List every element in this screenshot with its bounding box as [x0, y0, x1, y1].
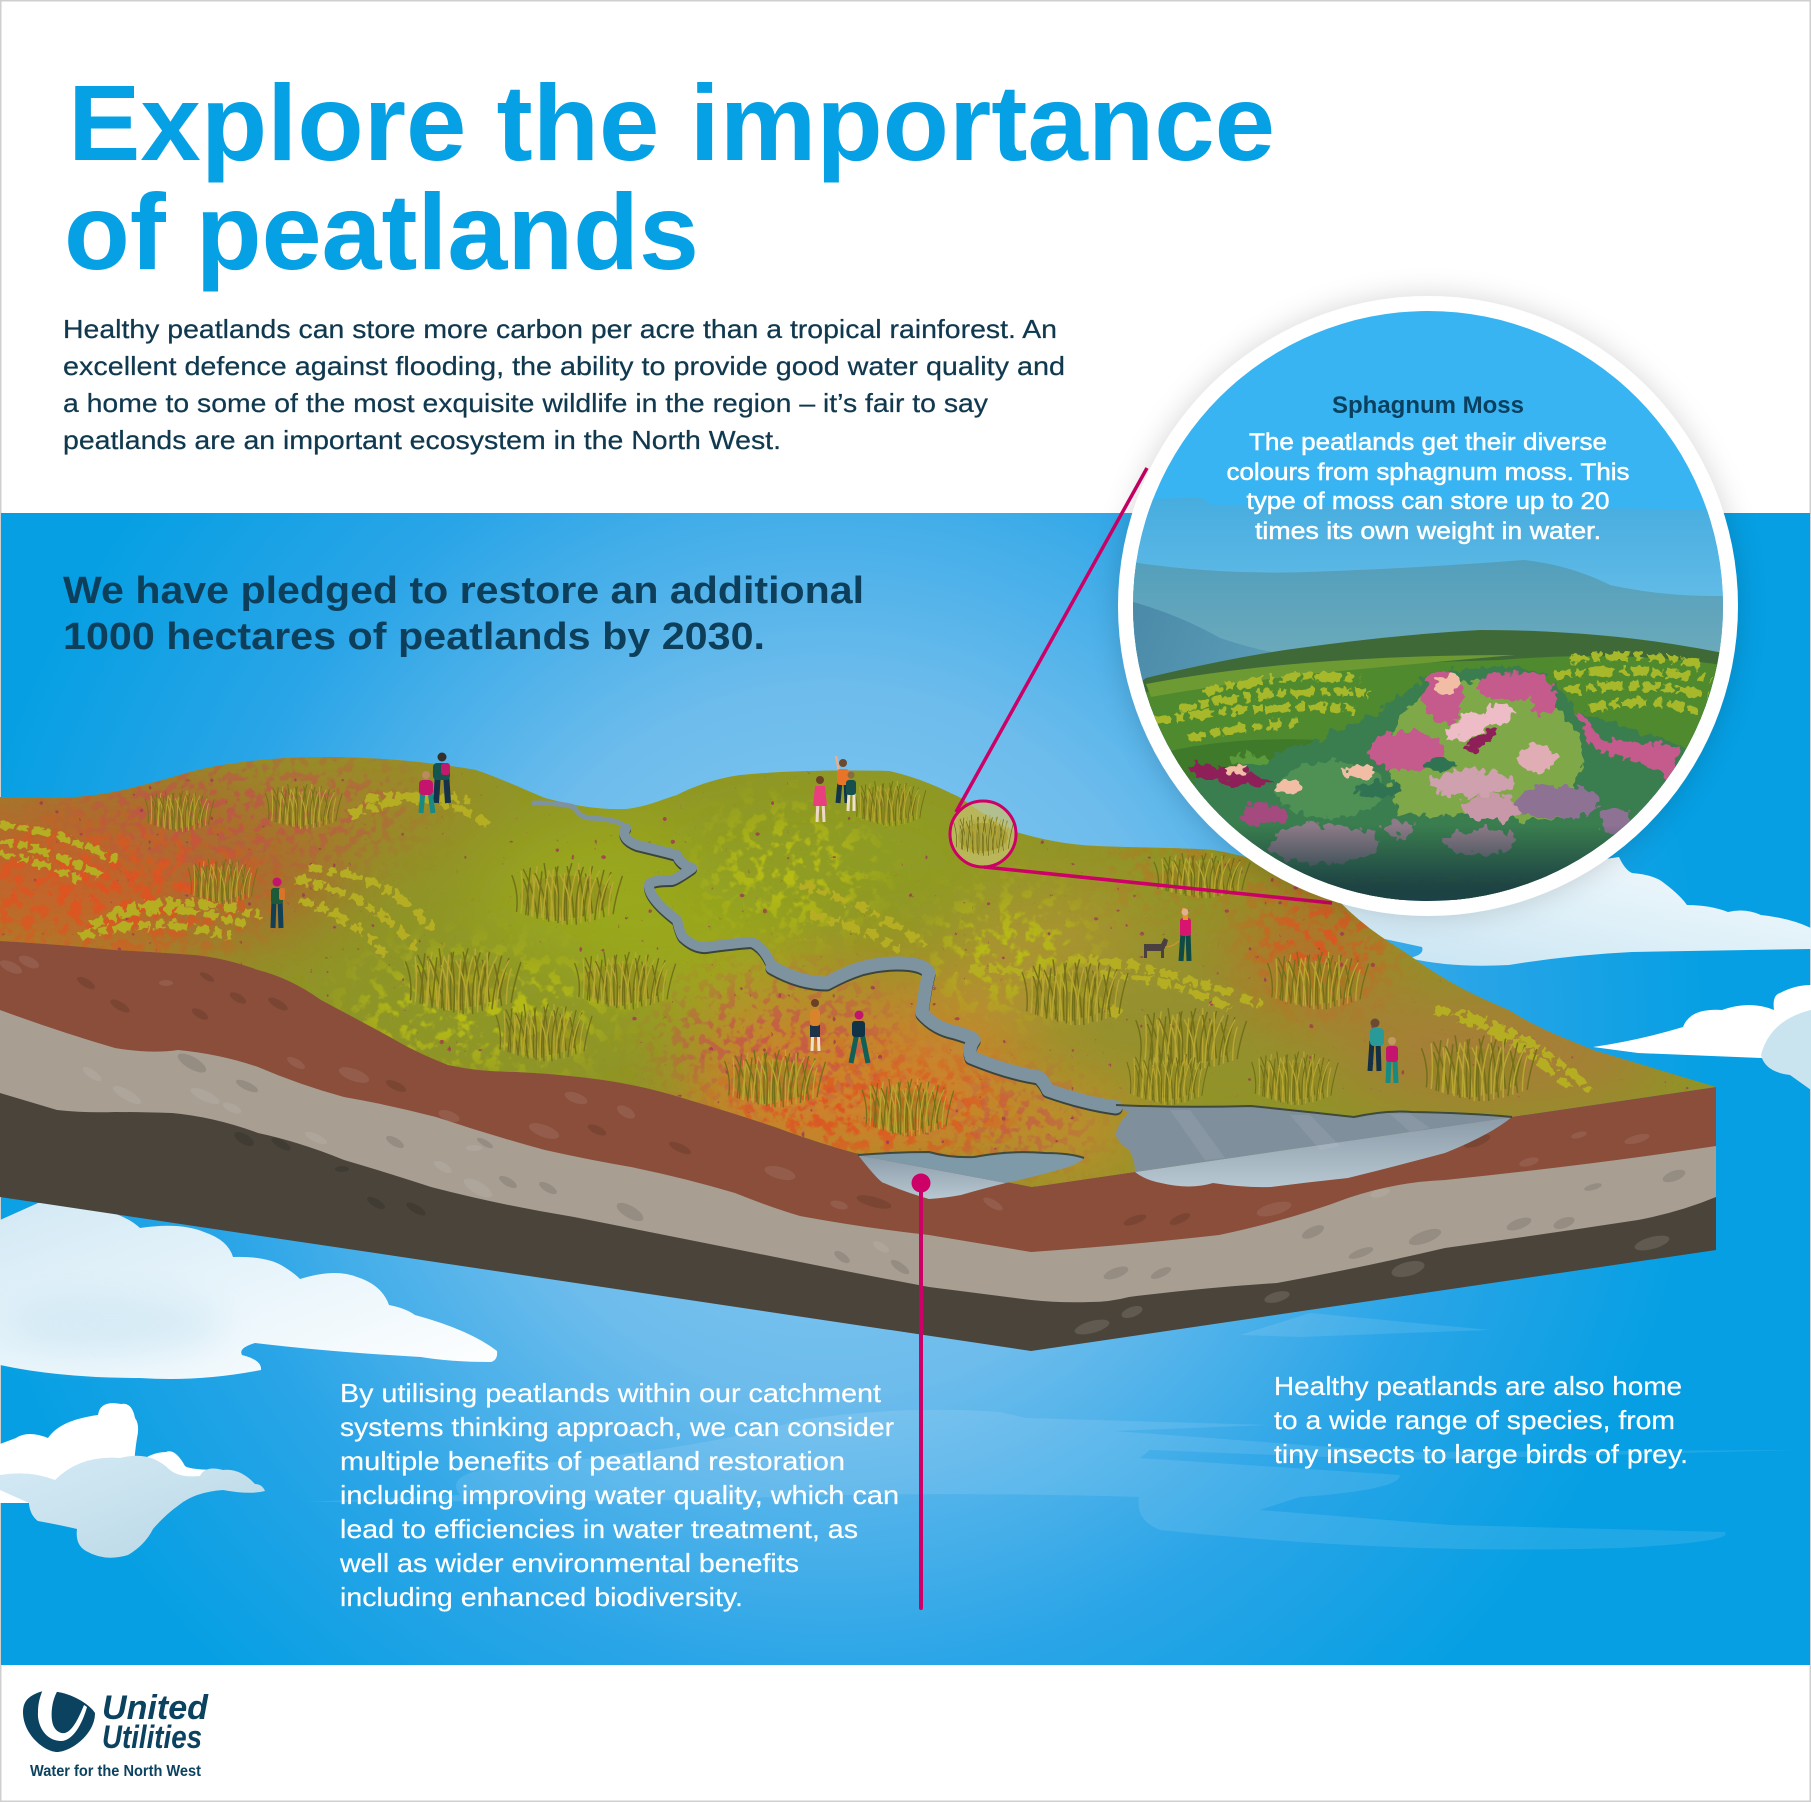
panel: sphagnum moss lens: [1118, 296, 1738, 916]
pink moss texture: [76, 757, 1096, 1178]
yellow-green moss texture: [340, 797, 1099, 1072]
grass tufts: [145, 781, 1537, 1136]
text block: species: tiny insects to large birds of prey.: [1274, 1439, 1688, 1469]
person: woman on path: [810, 999, 820, 1051]
layer: grey-tan mineral soil: [0, 1000, 1716, 1302]
stones: dark layer: [1073, 1233, 1671, 1337]
lens body text: The peatlands get their diverse: [1249, 429, 1607, 456]
people: [271, 752, 1398, 1083]
logo wordmark: United: [102, 1689, 209, 1727]
text block: catchment systems: systems thinking approach, we can consider: [340, 1412, 894, 1442]
title: [64, 62, 1275, 292]
logo: United Utilities: [23, 1689, 209, 1780]
person: child: [846, 772, 856, 811]
person: man waving in orange: [836, 756, 849, 803]
text block: catchment systems: [339, 1378, 899, 1612]
peat hag blocks: [0, 796, 1590, 1090]
callout pin: water quality: [912, 1174, 930, 1608]
pond: small front pond: [858, 1152, 1084, 1199]
person: woman in pink: [813, 776, 827, 822]
logo strapline: Water for the North West: [30, 1763, 202, 1780]
logo wordmark: Utilities: [102, 1719, 202, 1755]
cloud: lower left small: [0, 1403, 265, 1558]
lens heading: Sphagnum Moss: [1332, 392, 1524, 419]
person: woman by pond: [1386, 1037, 1398, 1083]
text block: species: Healthy peatlands are also home: [1274, 1371, 1682, 1401]
icon: dog: [1144, 938, 1179, 958]
lens body text: colours from sphagnum moss. This: [1226, 459, 1630, 486]
icon: logo mark: [23, 1689, 95, 1752]
peat block cross-section: [0, 935, 1716, 1351]
text block: catchment systems: By utilising peatlands within our catchment: [340, 1378, 882, 1408]
title: of peatlands: [64, 171, 699, 292]
cloud: lower left large: [0, 1202, 497, 1379]
text block: catchment systems: well as wider environmental benefits: [339, 1548, 799, 1578]
pledge heading: We have pledged to restore an additional: [63, 570, 864, 612]
intro paragraph: a home to some of the most exquisite wildlife in the region – it’s fair to say: [63, 388, 988, 418]
moss mound: [1183, 666, 1690, 880]
river: [534, 803, 1116, 1109]
terrain surface: [0, 740, 1730, 1200]
pledge heading: [63, 570, 864, 658]
pond: large right pond: [1116, 1105, 1512, 1187]
lens illustration: [1130, 310, 1730, 910]
intro paragraph: Healthy peatlands can store more carbon per acre than a tropical rainforest. An: [63, 314, 1057, 344]
text block: catchment systems: including enhanced biodiversity.: [340, 1582, 743, 1612]
magnifier marker on hillside: [950, 801, 1016, 867]
stones: lighter: [0, 953, 1651, 1255]
pledge heading: 1000 hectares of peatlands by 2030.: [63, 616, 765, 658]
magenta speckles: [0, 740, 1730, 1200]
callout lines: [956, 468, 1332, 903]
text block: species: to a wide range of species, from: [1274, 1405, 1675, 1435]
orange-red moss texture: [0, 812, 1402, 1156]
lens body text: type of moss can store up to 20: [1246, 488, 1610, 515]
person: woman on left hill: [419, 771, 433, 813]
faint cloud wisps: [306, 1313, 1800, 1550]
text block: catchment systems: multiple benefits of peatland restoration: [340, 1446, 845, 1476]
text block: catchment systems: lead to efficiencies in water treatment, as: [340, 1514, 858, 1544]
cloud: middle right: [1593, 985, 1811, 1090]
cloud: upper right: [1330, 857, 1811, 966]
layer: dark bedrock: [0, 1050, 1716, 1351]
lens body text: times its own weight in water.: [1255, 518, 1601, 545]
text block: catchment systems: including improving water quality, which can: [340, 1480, 899, 1510]
person: woman walking dog: [1180, 908, 1191, 961]
intro paragraph: excellent defence against flooding, the ability to provide good water quality and: [63, 351, 1065, 381]
terrain colour zones: [0, 760, 1670, 1175]
lens bottom shading: [1242, 830, 1619, 901]
panel: sky background: [1, 513, 1810, 1665]
intro paragraph: [63, 314, 1065, 455]
title: Explore the importance: [68, 62, 1275, 183]
stones: darker: [75, 970, 1687, 1282]
intro paragraph: peatlands are an important ecosystem in the North West.: [63, 425, 781, 455]
olive moss patches: [1155, 656, 1712, 738]
person: man on left hill: [433, 752, 450, 803]
person: hiker on path: [851, 1010, 868, 1063]
lens body text: [1226, 429, 1630, 545]
logo wordmark: [102, 1689, 209, 1755]
text block: species: [1274, 1371, 1688, 1469]
person: photographer: [271, 878, 285, 928]
layer: brown peat: [0, 935, 1716, 1252]
person: man by pond: [1370, 1018, 1384, 1071]
